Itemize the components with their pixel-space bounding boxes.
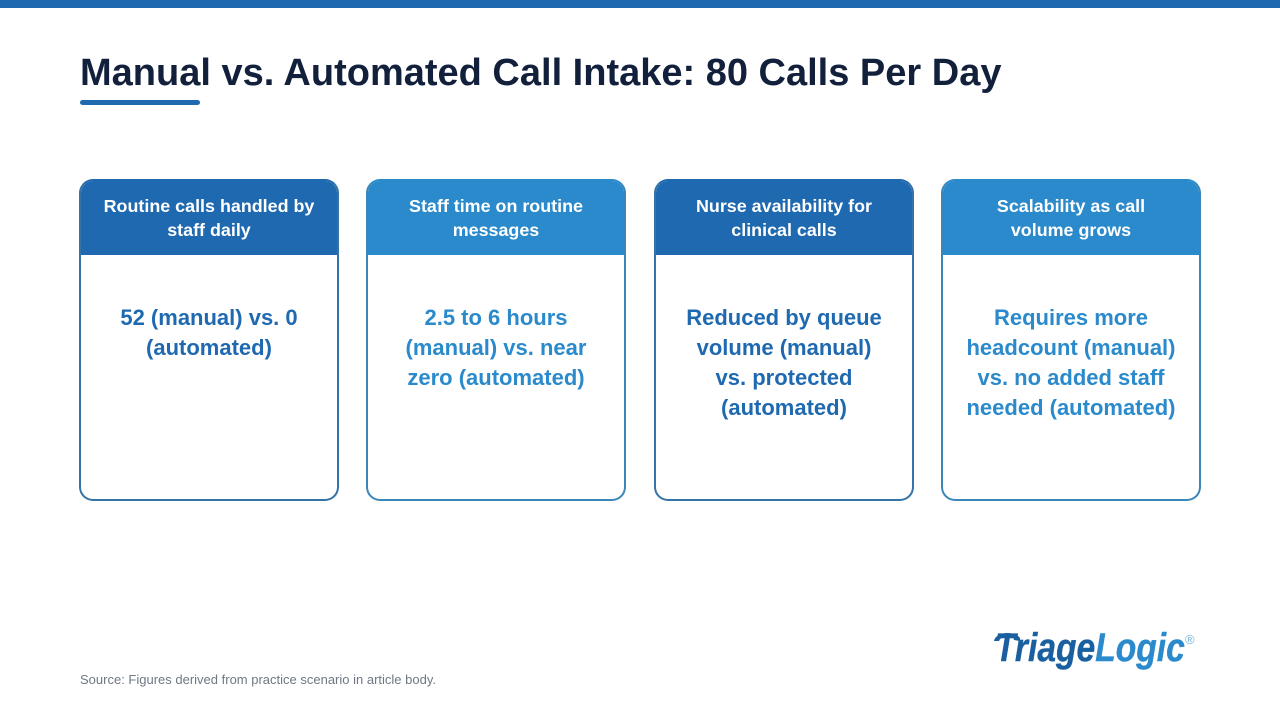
logo wordmark: TriageLogic [995,626,1185,670]
title underline [80,100,200,105]
panel: staff time [366,179,626,501]
panel value: nurse availability: (automated) [721,395,847,420]
panel heading: routine calls [79,179,339,255]
panel heading: routine calls: staff daily [167,220,251,240]
panel heading: nurse availability: clinical calls [731,220,837,240]
panel value: nurse availability [686,305,882,420]
panel value: staff time: 2.5 to 6 hours [424,305,568,330]
logo registered mark: ® [1185,632,1195,647]
panel heading: scalability: volume grows [1011,220,1131,240]
panel heading: nurse availability [654,179,914,255]
panel value: routine calls: (automated) [146,335,272,360]
panel value: staff time: (manual) vs. near [406,335,586,360]
panel value: scalability [966,305,1176,420]
panel value: staff time [406,305,586,390]
panel heading: routine calls: Routine calls handled by [104,196,314,216]
panel: scalability [941,179,1201,501]
title: Manual vs. Automated Call Intake: 80 Calls Per Day [80,52,1001,94]
logo: TriageLogic [994,626,1195,670]
logo phone arc [994,633,1020,641]
panel: routine calls [79,179,339,501]
panel value: routine calls: 52 (manual) vs. 0 [120,305,298,330]
panel heading: scalability: Scalability as call [997,196,1145,216]
panel value: nurse availability: Reduced by queue [686,305,882,330]
panel value: scalability: headcount (manual) [966,335,1176,360]
panel value: nurse availability: vs. protected [716,365,852,390]
panel heading: staff time [366,179,626,255]
panel heading: staff time: Staff time on routine [409,196,583,216]
panel heading: staff time: messages [453,220,539,240]
panel value: scalability: needed (automated) [966,395,1176,420]
panel value: staff time: zero (automated) [407,365,585,390]
panel: nurse availability [654,179,914,501]
panel value: scalability: Requires more [994,305,1148,330]
top bar [0,0,1280,8]
source note: Source: Figures derived from practice scenario in article body. [80,672,436,687]
panel value: scalability: vs. no added staff [977,365,1165,390]
panel heading: scalability [941,179,1201,255]
panel heading: nurse availability: Nurse availability for [696,196,872,216]
panel value: routine calls [120,305,298,360]
panel value: nurse availability: volume (manual) [697,335,871,360]
